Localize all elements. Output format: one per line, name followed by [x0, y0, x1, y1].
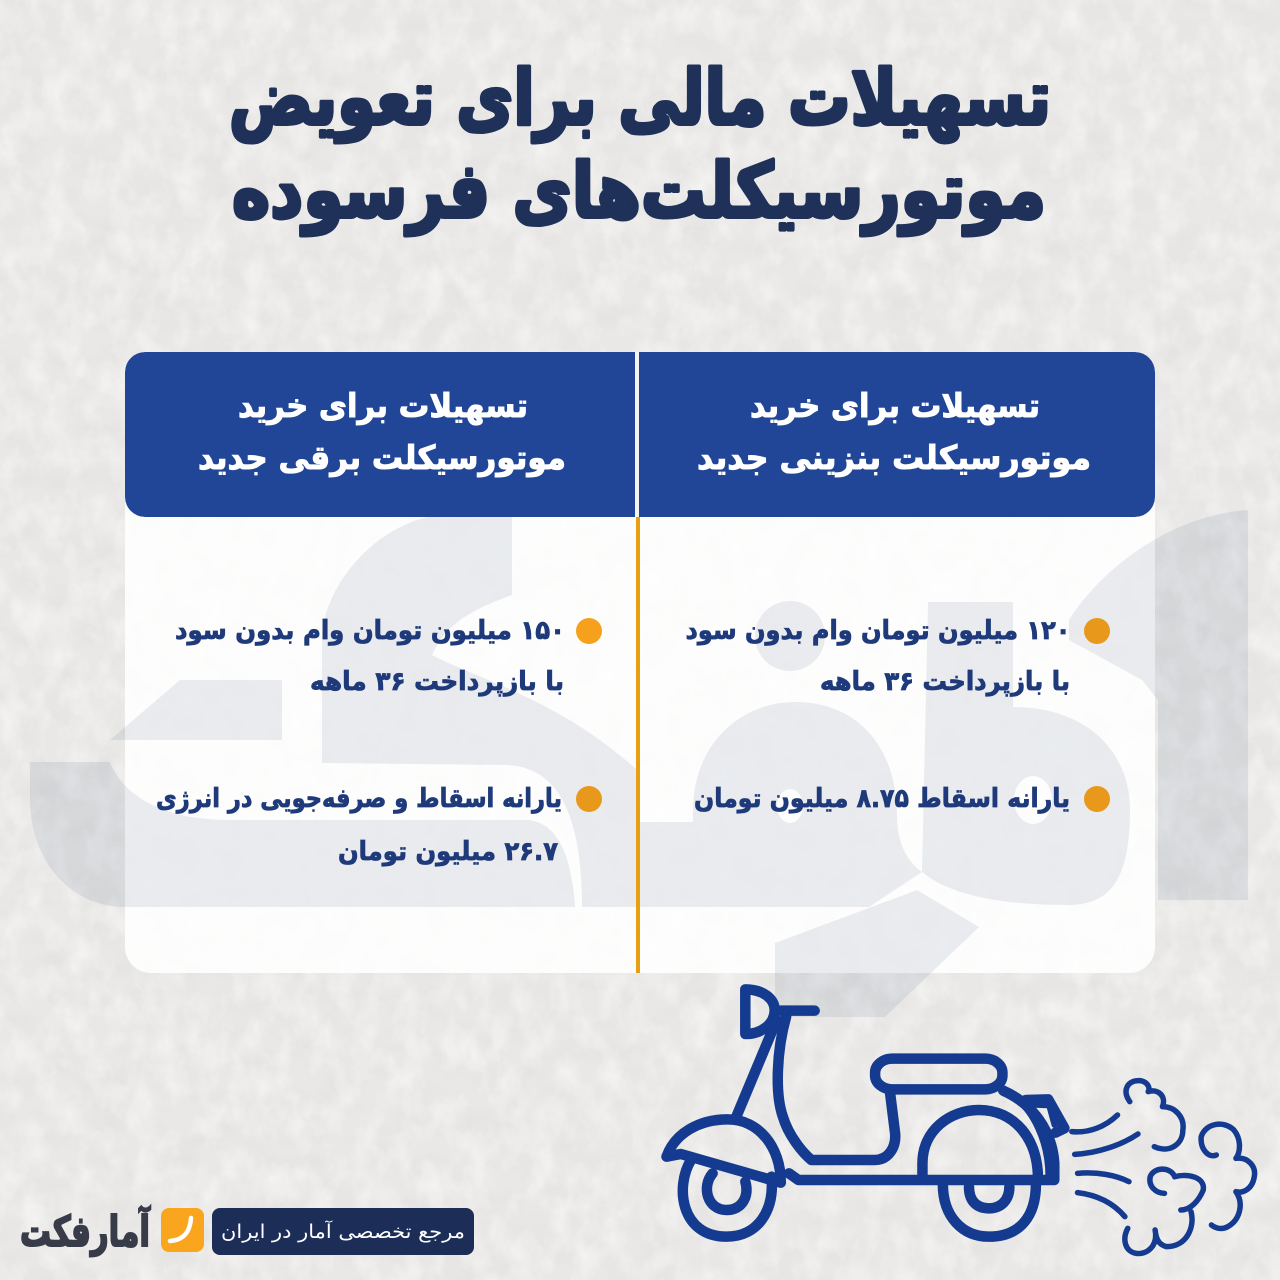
- footer: logo icon: [161, 1208, 204, 1252]
- footer: logo wordmark: آمارفکت: [20, 1206, 151, 1256]
- text: electric loan: با بازپرداخت ۳۶ ماهه: [310, 667, 564, 697]
- bullet: subsidy: [576, 786, 602, 812]
- heading: electric motorcycle column: موتورسیکلت برقی جدید: [198, 438, 566, 478]
- title: تسهیلات مالی برای تعویض: [229, 53, 1051, 143]
- heading: electric motorcycle column: [198, 386, 566, 478]
- text: gasoline loan: با بازپرداخت ۳۶ ماهه: [820, 667, 1070, 697]
- bullet: subsidy: [1084, 786, 1110, 812]
- text: gasoline loan: [686, 616, 1070, 697]
- text: gasoline subsidy: یارانه اسقاط ۸.۷۵ میلیون تومان: [694, 784, 1070, 814]
- footer: tagline badge: مرجع تخصصی آمار در ایران: [221, 1219, 465, 1243]
- panel: table header: [125, 352, 1155, 517]
- heading: electric motorcycle column: تسهیلات برای خرید: [238, 386, 528, 426]
- text: electric subsidy: یارانه اسقاط و صرفه‌جویی در انرژی: [156, 784, 562, 814]
- title: [229, 53, 1051, 236]
- heading: gasoline motorcycle column: تسهیلات برای خرید: [750, 386, 1040, 426]
- heading: gasoline motorcycle column: [697, 386, 1091, 478]
- watermark logo: [30, 510, 1248, 1017]
- bullet: loan: [576, 618, 602, 644]
- text: gasoline loan: ۱۲۰ میلیون تومان وام بدون سود: [686, 616, 1070, 646]
- title: موتورسیکلت‌های فرسوده: [232, 146, 1046, 236]
- column divider: [636, 517, 640, 973]
- icon: scooter with exhaust: [667, 989, 1255, 1254]
- text: electric loan: ۱۵۰ میلیون تومان وام بدون سود: [175, 616, 565, 646]
- heading: gasoline motorcycle column: موتورسیکلت بنزینی جدید: [697, 438, 1091, 478]
- text: electric subsidy: [156, 784, 562, 867]
- footer: tagline badge: [212, 1208, 474, 1255]
- panel: electric column items: [156, 616, 602, 867]
- panel: comparison card body: [125, 480, 1155, 973]
- bullet: loan: [1084, 618, 1110, 644]
- text: electric subsidy: ۲۶.۷ میلیون تومان: [338, 837, 558, 867]
- panel: gasoline column items: [686, 616, 1110, 814]
- text: electric loan: [175, 616, 565, 697]
